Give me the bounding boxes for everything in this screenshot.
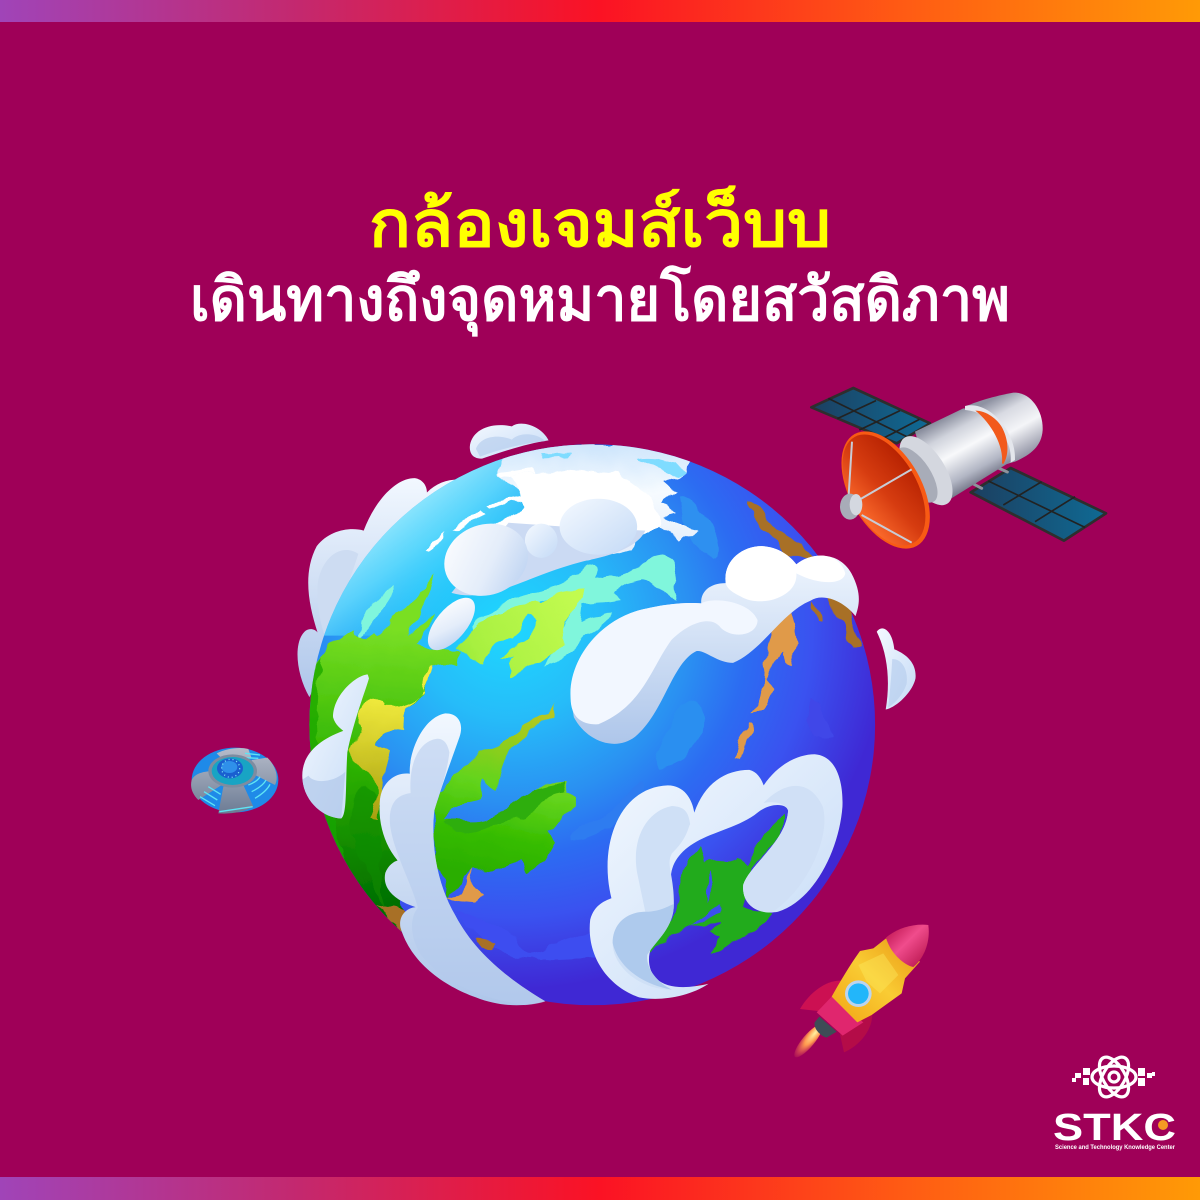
lower body: [817, 997, 863, 1036]
flame: [790, 1021, 826, 1061]
light stripes: [200, 753, 270, 812]
porthole: [845, 980, 872, 1007]
atom emblem: [1092, 1052, 1136, 1102]
globe illustration: [298, 424, 916, 1009]
left continent: [304, 575, 462, 939]
dish struts: [849, 442, 912, 543]
rocket: [790, 925, 929, 1061]
rear cylinder: [965, 393, 1043, 465]
orange land right strip: [751, 612, 798, 713]
dark green strip: [442, 781, 568, 834]
dome: [217, 758, 243, 778]
cap cloud puffs: [419, 499, 637, 658]
wordmark: STKC: [1053, 1107, 1176, 1149]
central ring: [208, 754, 257, 788]
flying saucer: [191, 748, 278, 814]
dish neck: [888, 441, 946, 509]
yellow highland: [350, 667, 433, 822]
left fin: [800, 981, 842, 1012]
earth sphere: [304, 441, 880, 1009]
small cloud above globe: [470, 424, 549, 459]
title line 1: กล้องเจมส์เว็บบ: [369, 186, 831, 260]
main cylinder: [915, 408, 1013, 503]
STKC logo: [1053, 1052, 1176, 1151]
dome lights: [222, 759, 240, 777]
tagline: Science and Technology Knowledge Center: [1055, 1145, 1176, 1151]
front solar panel: [971, 468, 1106, 541]
lime land: [456, 589, 585, 675]
title line 2: เดินทางถึงจุดหมายโดยสวัสดิภาพ: [190, 264, 1010, 337]
top gradient bar: [0, 0, 1200, 22]
back solar panel: [811, 388, 930, 443]
small cloud right of globe: [877, 628, 916, 710]
title: [190, 186, 1010, 337]
lower right cloud: [590, 754, 843, 999]
dish: [823, 417, 948, 563]
brown land top right: [747, 503, 819, 558]
rear flange edge: [965, 405, 1015, 463]
lower right island: [647, 813, 787, 955]
cap underside band: [451, 523, 645, 595]
saucer hull: [192, 748, 278, 812]
darker green band at left: [310, 658, 345, 860]
polar ice cap: [426, 444, 698, 560]
nozzle: [814, 1017, 837, 1038]
rods: [963, 465, 1007, 488]
ocean: [304, 441, 880, 1009]
feed horn: [840, 494, 862, 520]
land masses: [304, 503, 860, 955]
right fin: [840, 1012, 872, 1052]
left tall cloud: [380, 713, 545, 1005]
polar glow: [304, 441, 590, 636]
gold body: [832, 938, 920, 1022]
satellite: [811, 388, 1106, 563]
body highlight: [858, 953, 898, 993]
pixel dots: [1072, 1068, 1155, 1086]
mint land: [358, 556, 678, 667]
back clouds, upper left: [298, 478, 464, 697]
central swirl cloud: [570, 546, 859, 744]
orange ring: [975, 411, 1007, 464]
left small cloud: [302, 675, 369, 818]
orange land patch: [448, 867, 482, 902]
gray panels: [191, 748, 277, 814]
central continent: [434, 702, 576, 896]
island inlets: [688, 871, 723, 927]
inner shade of back clouds: [317, 550, 358, 643]
orange dot: [1158, 1120, 1168, 1130]
orange land small: [736, 723, 752, 760]
nose cone: [886, 925, 929, 967]
darker sea shapes: [451, 495, 831, 960]
front flange: [889, 428, 963, 514]
brown streaks: [476, 596, 860, 949]
bottom gradient bar: [0, 1177, 1200, 1200]
